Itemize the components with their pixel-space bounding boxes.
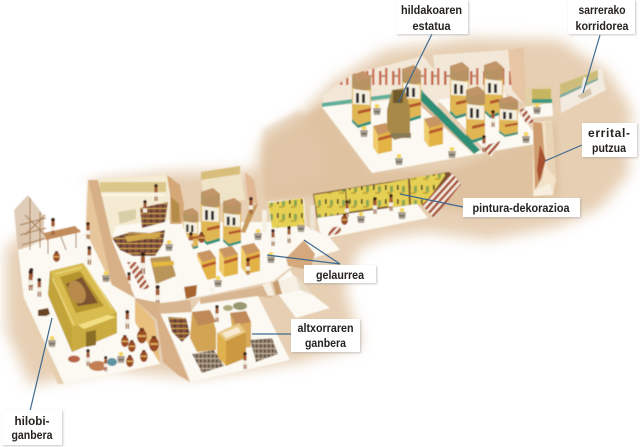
funeral furniture xyxy=(112,184,197,305)
room: left upper chamber xyxy=(322,56,484,173)
sarcophagus xyxy=(48,263,117,352)
ritual well xyxy=(533,121,556,196)
label: altxorraren ganbera: ganbera xyxy=(305,336,346,350)
ladder xyxy=(241,204,258,233)
label: sarrerako korridorea: sarrerako xyxy=(578,3,626,17)
scaffold xyxy=(14,195,81,254)
stairs xyxy=(483,141,500,157)
sand background xyxy=(6,38,632,385)
chests and shrine xyxy=(190,302,251,366)
label: hilobi-ganbera: ganbera xyxy=(12,428,53,442)
ramp xyxy=(164,222,214,295)
lamps xyxy=(360,104,456,165)
label: altxorraren ganbera xyxy=(291,319,361,353)
towers xyxy=(450,61,530,143)
chests and towers xyxy=(183,188,305,287)
figures xyxy=(341,194,406,225)
workers xyxy=(28,222,130,363)
jars at the back xyxy=(233,302,247,310)
jars xyxy=(121,328,159,367)
offerings xyxy=(68,349,117,371)
niche stairs xyxy=(275,270,330,318)
painted corridor xyxy=(313,172,461,238)
stairs xyxy=(422,173,461,218)
label: errital-putzua: errital- xyxy=(588,126,630,140)
label: errital-putzua xyxy=(582,123,638,158)
antechamber xyxy=(164,166,340,318)
middle hall with furniture xyxy=(98,175,214,305)
label: pintura-dekorazioa xyxy=(463,198,581,218)
chariots and stacked goods xyxy=(168,317,278,373)
room: upper right chamber xyxy=(433,47,542,157)
label: hildakoaren estatua: estatua xyxy=(412,19,451,33)
wall between hall and burial chamber xyxy=(88,180,190,382)
label: gelaurrea xyxy=(304,265,377,284)
entrance corridor xyxy=(560,68,606,113)
towers, chests and statue of the deceased xyxy=(352,65,443,154)
label: pintura-dekorazioa: pintura-dekorazioa xyxy=(472,201,570,215)
label: hildakoaren estatua: hildakoaren xyxy=(401,3,462,17)
label: sarrerako korridorea xyxy=(568,0,636,35)
burial chamber xyxy=(14,180,160,384)
label: altxorraren ganbera: altxorraren xyxy=(298,321,354,335)
label: gelaurrea: gelaurrea xyxy=(316,268,364,282)
treasury xyxy=(158,282,290,382)
scene artwork xyxy=(14,47,606,384)
label: hilobi-ganbera: hilobi- xyxy=(14,414,50,428)
label: hilobi-ganbera xyxy=(2,410,63,446)
label: sarrerako korridorea: korridorea xyxy=(576,19,629,33)
leader lines xyxy=(30,34,600,411)
label: errital-putzua: putzua xyxy=(592,141,626,155)
label: hildakoaren estatua xyxy=(396,0,469,35)
entrance room and corridor xyxy=(520,68,606,124)
